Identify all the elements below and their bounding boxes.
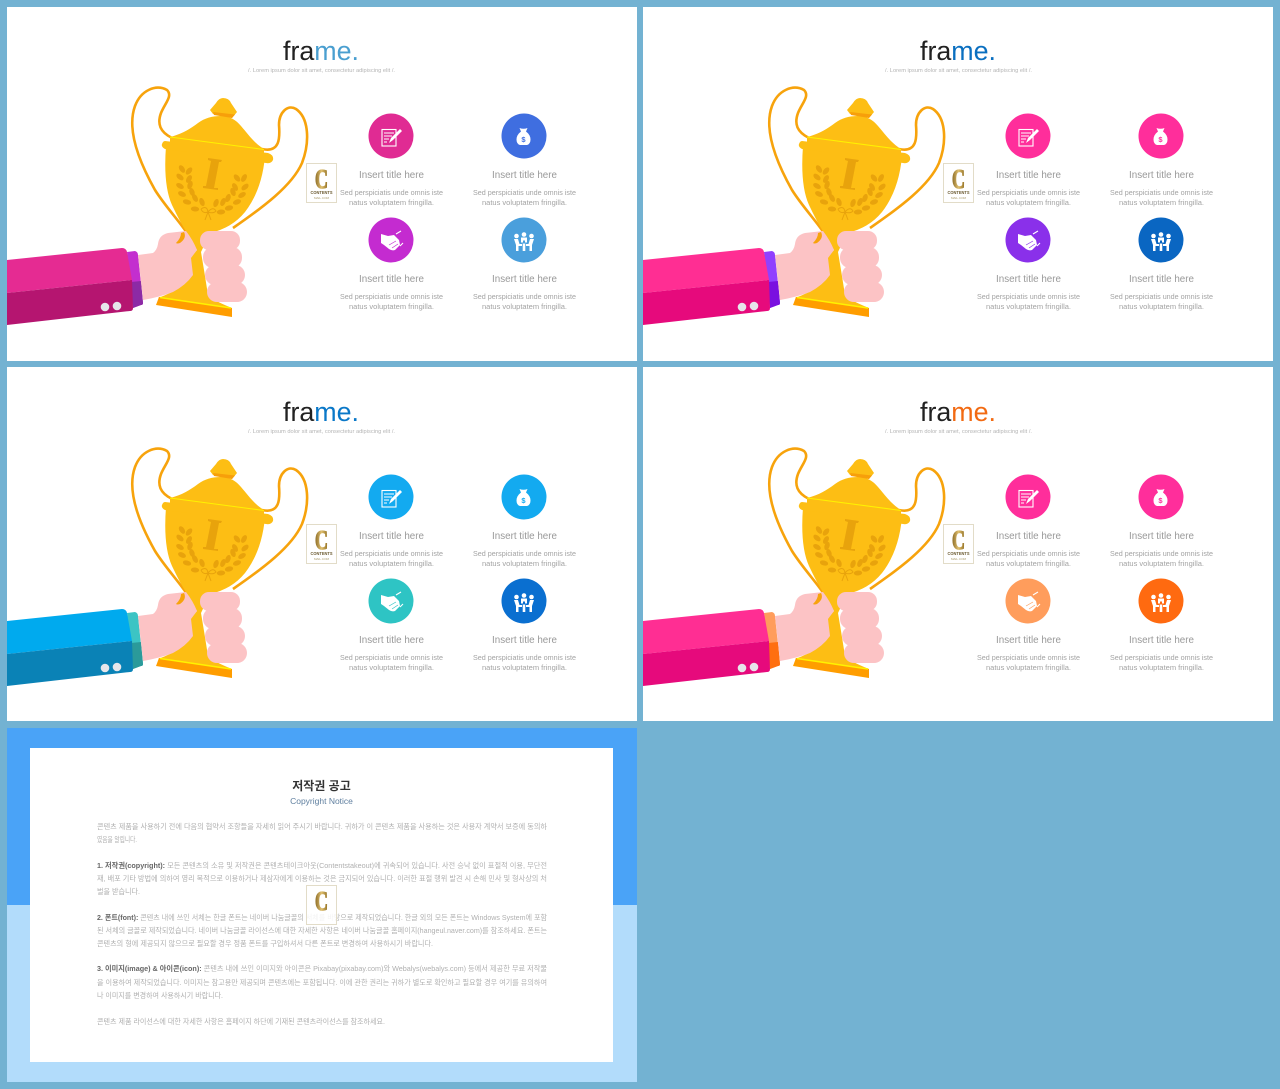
- item: note: natus voluptatem fringilla.: [349, 559, 434, 568]
- panel: gold cup slide, pink and violet sleeve: [643, 7, 1273, 361]
- item: money bag: [1110, 474, 1213, 568]
- item: money bag: natus voluptatem fringilla.: [1119, 559, 1204, 568]
- item: note: Sed perspiciatis unde omnis iste: [977, 188, 1080, 197]
- subtitle: /. Lorem ipsum dolor sit amet, consectetur adipiscing elit /.: [885, 429, 1032, 435]
- item: people: Sed perspiciatis unde omnis iste: [1110, 653, 1213, 662]
- item: people: Insert title here: [492, 635, 557, 646]
- item: note: [977, 114, 1080, 207]
- text block: font: 된 서체의 글꼴로 제작되었습니다. 네이버 나눔글꼴 라이선스에 대한 자세한 사항은 네이버 나눔글꼴 홈페이지(hangeul.naver.com)를 참조하세요. 폰트는: [97, 926, 547, 935]
- watermark logo: CONTENTS: [948, 190, 970, 195]
- panel: gold cup slide, pink and orange sleeve: [643, 367, 1273, 721]
- text block: font: [97, 913, 547, 948]
- item: note: Sed perspiciatis unde omnis iste: [340, 188, 443, 197]
- item: people: [473, 218, 576, 311]
- item: note: Insert title here: [359, 170, 424, 181]
- watermark logo: MAIL.COM: [951, 557, 966, 561]
- item: money bag: Insert title here: [492, 170, 557, 181]
- heading: 저작권 공고: [292, 778, 351, 793]
- item: note: Sed perspiciatis unde omnis iste: [340, 549, 443, 558]
- subheading: Copyright Notice: [290, 796, 353, 806]
- watermark logo: MAIL.COM: [951, 196, 966, 200]
- text block: intro: 콘텐츠 제품을 사용하기 전에 다음의 협약서 조항들을 자세히 읽어 주시기 바랍니다. 귀하가 이 콘텐츠 제품을 사용하는 것은 사용자 계약서 보증에 동의하: [97, 822, 547, 831]
- panel: gold cup slide, blue sleeve: [7, 367, 637, 721]
- item: money bag: Sed perspiciatis unde omnis iste: [473, 188, 576, 197]
- text block: copyright: 재, 배포 기타 방법에 의하여 영리 목적으로 이용하거나 제삼자에게 이용하는 것은 금지되어 있습니다. 이러한 표절 행위 발견 시 손해 민사 및 형사상의 처: [97, 874, 547, 883]
- item: handshake: natus voluptatem fringilla.: [349, 663, 434, 672]
- watermark logo: C: [952, 164, 965, 194]
- item: handshake: [340, 218, 443, 311]
- item: handshake: natus voluptatem fringilla.: [986, 302, 1071, 311]
- item: people: [1110, 218, 1213, 311]
- item: money bag: Sed perspiciatis unde omnis iste: [1110, 188, 1213, 197]
- item: note: Sed perspiciatis unde omnis iste: [977, 549, 1080, 558]
- illustration: arm holding trophy: [7, 449, 307, 686]
- item: money bag: $: [1158, 135, 1163, 144]
- item: note: natus voluptatem fringilla.: [986, 559, 1071, 568]
- illustration: arm holding trophy: [643, 449, 944, 686]
- item: money bag: natus voluptatem fringilla.: [1119, 198, 1204, 207]
- item: people: natus voluptatem fringilla.: [1119, 302, 1204, 311]
- watermark logo: [306, 524, 336, 564]
- watermark logo: C: [952, 525, 965, 555]
- item: money bag: Insert title here: [1129, 170, 1194, 181]
- watermark logo: C: [315, 525, 328, 555]
- text block: font: 콘텐츠의 형에 제공되지 않으므로 필요할 경우 정품 폰트를 구입하셔서 다른 폰트로 변경하여 사용하시기 바랍니다.: [97, 939, 433, 948]
- text block: intro: [97, 822, 547, 844]
- item: handshake: Sed perspiciatis unde omnis iste: [977, 653, 1080, 662]
- item: handshake: [977, 578, 1080, 672]
- item: handshake: natus voluptatem fringilla.: [986, 663, 1071, 672]
- text block: copyright: [97, 861, 547, 896]
- item: handshake: [340, 578, 443, 672]
- watermark logo: MAIL.COM: [314, 196, 329, 200]
- title: frame.: [920, 397, 996, 427]
- item: people: Insert title here: [492, 274, 557, 285]
- item: people: Sed perspiciatis unde omnis iste: [473, 292, 576, 301]
- item: handshake: Insert title here: [359, 274, 424, 285]
- item: money bag: [473, 474, 576, 568]
- watermark logo: CONTENTS: [310, 190, 332, 195]
- item: money bag: Sed perspiciatis unde omnis iste: [473, 549, 576, 558]
- item: note: Insert title here: [996, 531, 1061, 542]
- title: frame.: [920, 36, 996, 66]
- item: handshake: Insert title here: [359, 635, 424, 646]
- item: money bag: $: [521, 496, 526, 505]
- item: money bag: $: [1158, 496, 1163, 505]
- item: note: natus voluptatem fringilla.: [986, 198, 1071, 207]
- item: money bag: Insert title here: [1129, 531, 1194, 542]
- item: handshake: Insert title here: [996, 635, 1061, 646]
- item: money bag: natus voluptatem fringilla.: [482, 559, 567, 568]
- item: people: Sed perspiciatis unde omnis iste: [1110, 292, 1213, 301]
- subtitle: /. Lorem ipsum dolor sit amet, consectetur adipiscing elit /.: [248, 429, 395, 435]
- panel: gold cup slide, magenta sleeve: [7, 7, 637, 361]
- subtitle: /. Lorem ipsum dolor sit amet, consectetur adipiscing elit /.: [248, 68, 395, 74]
- title: frame.: [283, 397, 359, 427]
- text block: image and icon: 나 이미지를 변경하여 사용하시기 바랍니다.: [97, 991, 223, 1000]
- text block: font: 2. 폰트(font): 콘텐츠 내에 쓰인 서체는 한글 폰트는 네이버 나눔글꼴의 서체를 바탕으로 제작되었습니다. 한글 외의 모든 폰트는 Windows System에 포함: [97, 913, 547, 922]
- item: handshake: Insert title here: [996, 274, 1061, 285]
- item: note: Insert title here: [359, 531, 424, 542]
- item: handshake: Sed perspiciatis unde omnis iste: [340, 292, 443, 301]
- text block: copyright: 벌을 받습니다.: [97, 887, 140, 896]
- item: note: [977, 474, 1080, 568]
- item: people: natus voluptatem fringilla.: [482, 302, 567, 311]
- text block: intro: 였음을 알립니다.: [97, 835, 137, 844]
- text block: copyright: 1. 저작권(copyright): 모든 콘텐츠의 소유 및 저작권은 콘텐츠테이크아웃(Contentstakeout)에 귀속되어 있습니다. 사전 승낙 없이 표절적 이용, 무단전: [97, 861, 547, 870]
- item: money bag: Insert title here: [492, 531, 557, 542]
- item: people: natus voluptatem fringilla.: [482, 663, 567, 672]
- watermark logo: C: [315, 886, 328, 916]
- text block: license note: 콘텐츠 제품 라이선스에 대한 자세한 사항은 홈페이지 하단에 기재된 콘텐츠라이선스를 참조하세요.: [97, 1017, 385, 1026]
- illustration: arm holding trophy: [7, 88, 307, 325]
- watermark logo: [306, 164, 336, 202]
- watermark logo: CONTENTS: [310, 551, 332, 556]
- item: handshake: natus voluptatem fringilla.: [349, 302, 434, 311]
- item: handshake: Sed perspiciatis unde omnis iste: [340, 653, 443, 662]
- item: people: natus voluptatem fringilla.: [1119, 663, 1204, 672]
- item: note: [340, 474, 443, 568]
- item: note: natus voluptatem fringilla.: [349, 198, 434, 207]
- item: money bag: [1110, 114, 1213, 207]
- item: money bag: natus voluptatem fringilla.: [482, 198, 567, 207]
- item: people: Insert title here: [1129, 635, 1194, 646]
- item: people: [473, 578, 576, 672]
- text block: image and icon: [97, 964, 547, 1000]
- watermark logo: CONTENTS: [948, 551, 970, 556]
- watermark logo: [944, 524, 974, 564]
- item: note: Insert title here: [996, 170, 1061, 181]
- item: note: [340, 114, 443, 207]
- illustration: arm holding trophy: [643, 88, 944, 325]
- subtitle: /. Lorem ipsum dolor sit amet, consectetur adipiscing elit /.: [885, 68, 1032, 74]
- item: handshake: [977, 218, 1080, 311]
- item: money bag: $: [521, 135, 526, 144]
- watermark logo: C: [315, 164, 328, 194]
- item: money bag: Sed perspiciatis unde omnis iste: [1110, 549, 1213, 558]
- item: people: [1110, 578, 1213, 672]
- text block: image and icon: 3. 이미지(image) & 아이콘(icon): 콘텐츠 내에 쓰인 이미지와 아이콘은 Pixabay(pixabay.com)와 Webalys(webalys.com) 등에서 제공한 무료 저작물: [97, 964, 547, 973]
- watermark logo: MAIL.COM: [314, 557, 329, 561]
- text block: image and icon: 을 이용하여 제작되었습니다. 이미지는 참고용만 제공되며 콘텐츠에는 포함됩니다. 이에 관한 권리는 귀하가 별도로 확인하고 필요할 경우 여기를 유의하여: [97, 978, 547, 987]
- panel: copyright notice: [7, 728, 637, 1082]
- item: money bag: [473, 114, 576, 207]
- title: frame.: [283, 36, 359, 66]
- watermark logo: [306, 886, 336, 924]
- item: people: Insert title here: [1129, 274, 1194, 285]
- item: handshake: Sed perspiciatis unde omnis iste: [977, 292, 1080, 301]
- item: people: Sed perspiciatis unde omnis iste: [473, 653, 576, 662]
- watermark logo: [944, 164, 974, 202]
